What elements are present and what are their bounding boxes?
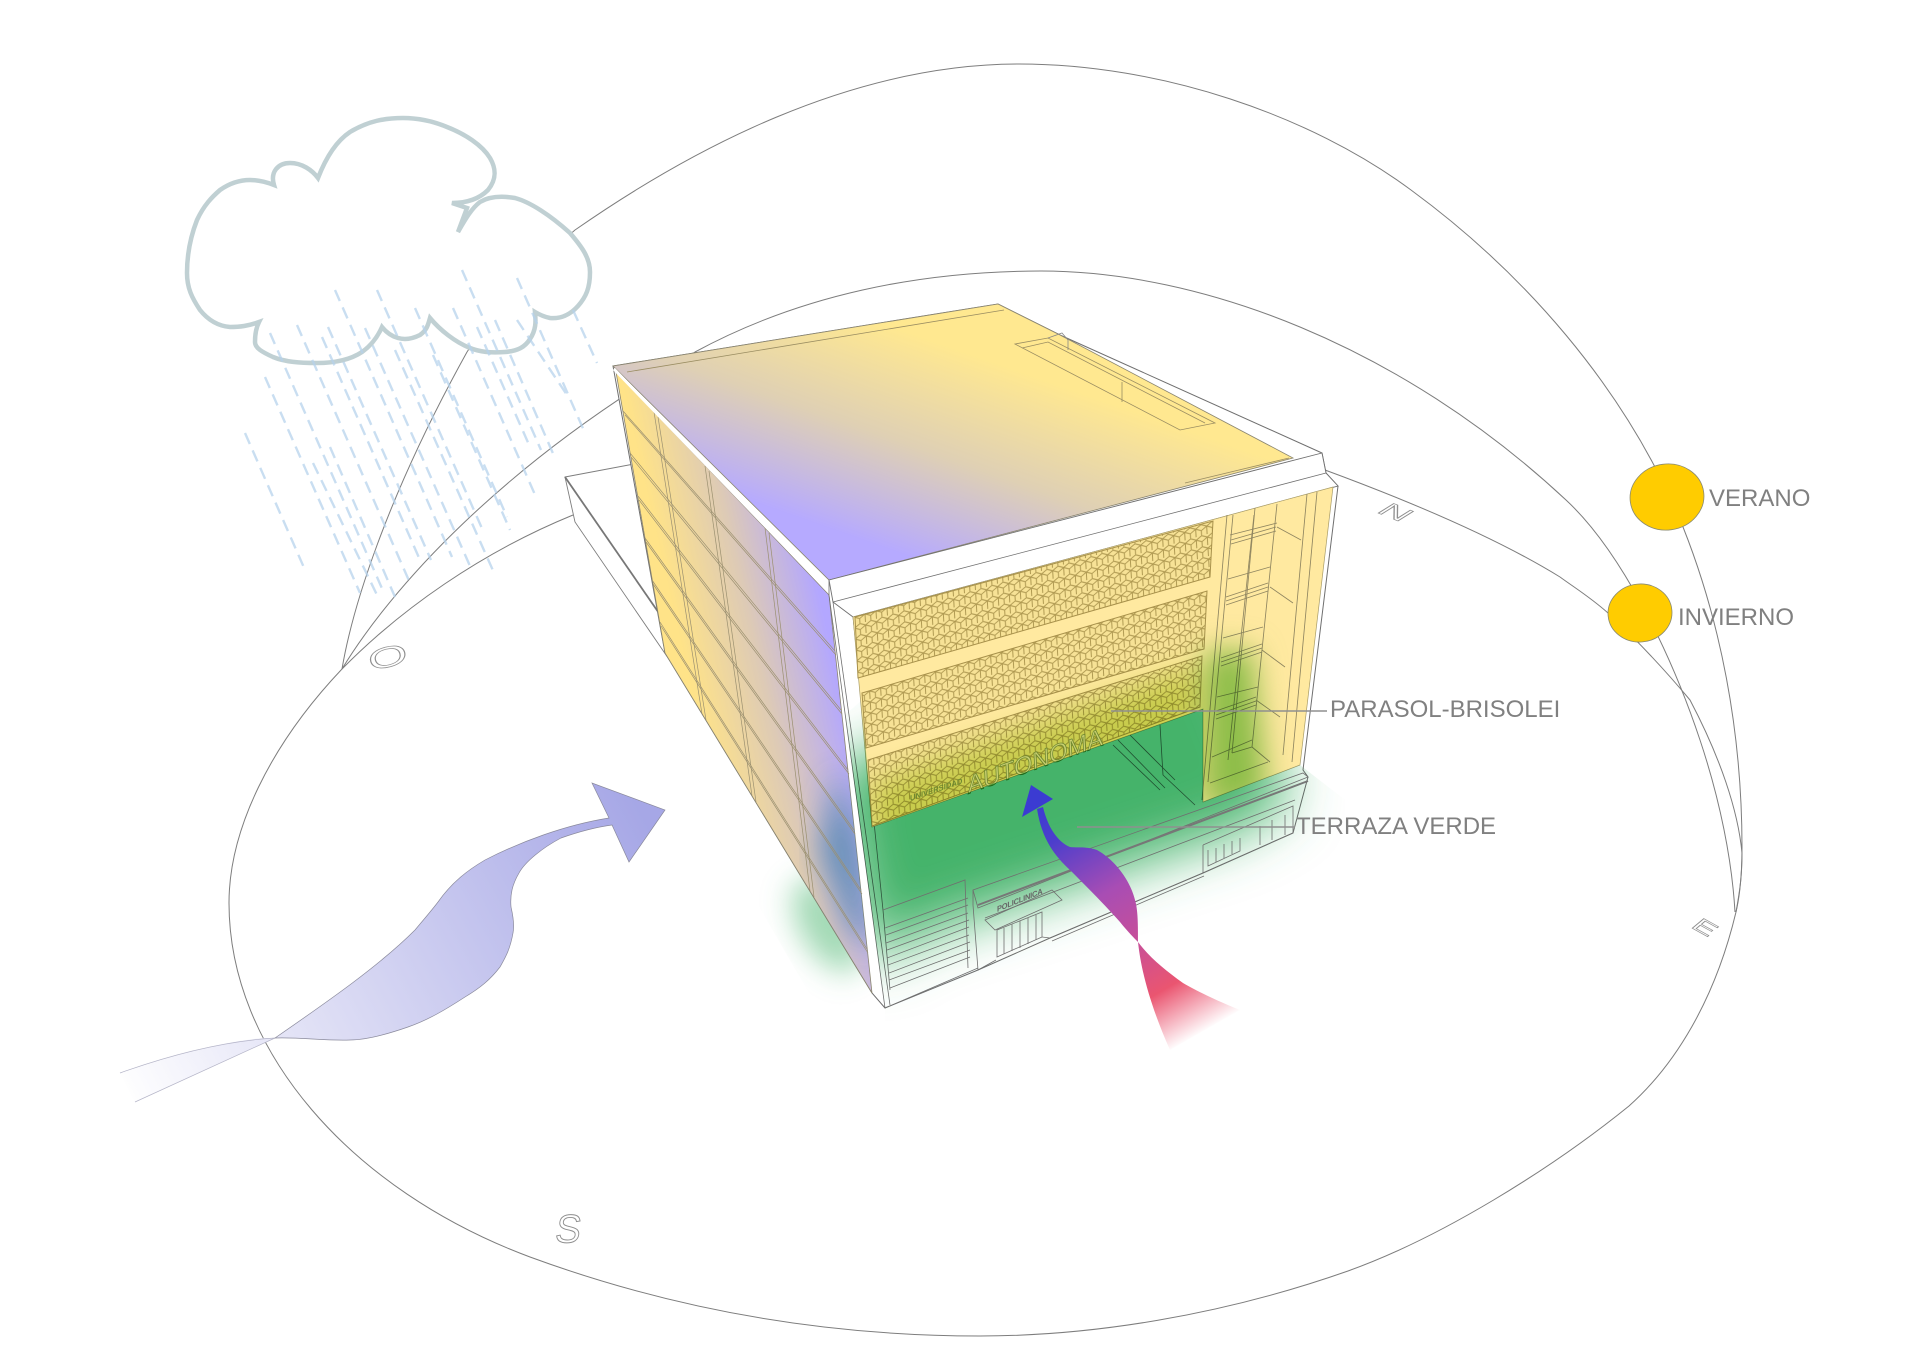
arrow: hot air rising through terrace [1022, 785, 1240, 1050]
AUTONOMA lettering: AUTONOMA [967, 723, 1104, 800]
letter N: N [1371, 500, 1421, 525]
entrance door [997, 912, 1042, 957]
right shop [1203, 806, 1293, 873]
rain [245, 270, 597, 597]
winter sun [1606, 581, 1794, 645]
garage door [883, 880, 968, 968]
label: invierno: INVIERNO [1678, 604, 1794, 631]
west facade [616, 372, 872, 993]
west facade blue tint [820, 770, 872, 950]
label: verano: VERANO [1709, 485, 1810, 512]
terrace parapet [973, 773, 1308, 908]
terrace opening lines [1113, 725, 1195, 805]
AUTONOMA lettering [910, 723, 1104, 803]
sun path dome lines [229, 64, 1742, 1336]
winter sun arc [342, 271, 1735, 912]
callout: parasol-brisoleil: PARASOL-BRISOLEI [1330, 696, 1560, 723]
entrance canopy [985, 890, 1062, 930]
roof details [627, 310, 1289, 483]
brise-soleil panels [855, 521, 1213, 826]
ground circle [229, 470, 1742, 1336]
green glow on ground beside building [778, 866, 878, 984]
POLICLINICA sign: POLICLINICA [997, 886, 1043, 914]
east facade yellow [853, 487, 1333, 827]
ground floor [883, 773, 1308, 1008]
letter S: S [553, 1208, 584, 1252]
cloud [187, 118, 590, 363]
cornice [829, 453, 1338, 1008]
east facade stair tower lines [1202, 492, 1317, 800]
summer sun arc [342, 64, 1742, 912]
brise band 3 [868, 656, 1202, 826]
compass letters [364, 500, 1724, 1252]
base plate [565, 461, 690, 690]
AUTONOMA lettering: UNIVERSIDAD [910, 776, 963, 803]
olive tint over lower brise [868, 654, 1214, 827]
brise band 2 [862, 591, 1207, 748]
roof edge highlight [614, 369, 829, 592]
summer sun [1626, 459, 1810, 535]
arrow: prevailing wind [120, 783, 665, 1102]
callout: terraza verde: TERRAZA VERDE [1296, 813, 1496, 840]
west facade window grid [623, 411, 868, 953]
brise band 1 [855, 521, 1213, 678]
letter E: E [1686, 914, 1724, 940]
roof [613, 304, 1293, 580]
building [613, 304, 1338, 1008]
letter O: O [364, 636, 411, 678]
green terrace [846, 707, 1327, 996]
building white silhouette [613, 304, 1338, 1008]
green tint over stair tower [1205, 650, 1268, 815]
